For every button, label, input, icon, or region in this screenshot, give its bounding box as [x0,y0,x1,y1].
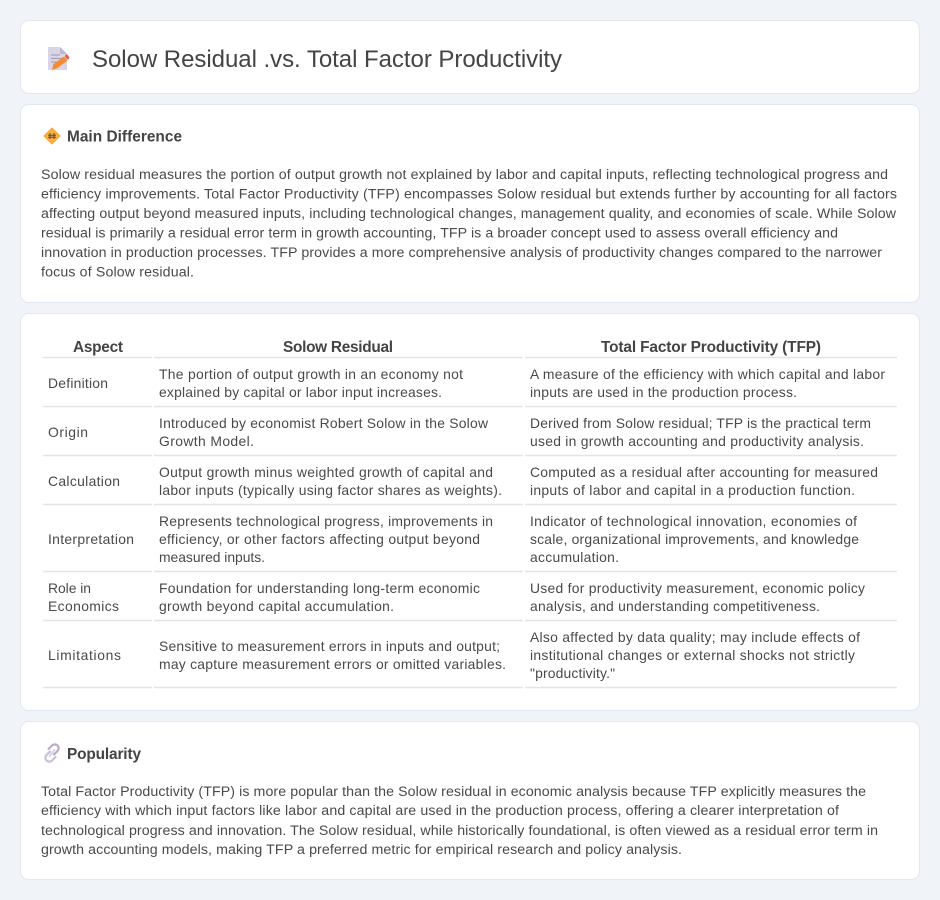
table row: calculation: inputs of labor and capital in a production function. [530,482,855,498]
panel: header [20,20,920,94]
table row: interpretation: measured inputs. [159,549,265,565]
text block: main difference paragraph: efficiency improvements. Total Factor Productivity (TFP) encompasses Solow residual but extends further by accounting for all factors [41,186,897,202]
table row: calculation: Computed as a residual after accounting for measured [530,464,878,480]
text block: popularity paragraph [41,784,878,858]
table row: interpretation [43,513,897,572]
icon: chain link [45,744,59,762]
table row: limitations: "productivity." [530,665,615,681]
table row: limitations: Also affected by data quality; may include effects of [530,629,860,645]
table row: origin: Origin [48,424,88,440]
text block: main difference paragraph: Solow residual measures the portion of output growth not explained by labor and capital inputs, reflecting technological progress and [41,167,888,183]
panel: main difference [20,104,920,302]
text block: main difference paragraph: residual is primarily a residual error term in growth accounting, TFP is a broader concept used to assess overall efficiency and [41,226,838,242]
table header row [43,339,897,358]
table header row: Total Factor Productivity (TFP) [601,339,821,356]
table row: role in economics: Used for productivity measurement, economic policy [530,580,865,596]
panel: popularity [20,722,920,880]
icon: document with pencil [48,47,70,70]
table header row: Aspect [73,339,123,356]
text block: main difference paragraph: affecting output beyond measured inputs, including technological changes, management quality, and economies of scale. While Solow [41,206,897,222]
table row: limitations: may capture measurement errors or omitted variables. [159,656,506,672]
table row: limitations: Sensitive to measurement errors in inputs and output; [159,638,500,654]
panel: comparison table [20,314,920,710]
table row: interpretation: scale, organizational improvements, and knowledge [530,531,859,547]
table row: role in economics: Foundation for understanding long-term economic [159,580,480,596]
table row: role in economics: Role in [48,580,91,596]
table row: origin: Growth Model. [159,433,254,449]
table row: calculation: labor inputs (typically using factor shares as weights). [159,482,502,498]
table row: definition: inputs are used in the production process. [530,384,797,400]
table row: role in economics: Economics [48,598,119,614]
table row: definition [43,366,897,406]
table row: origin: Introduced by economist Robert Solow in the Solow [159,415,489,431]
table row: interpretation: Represents technological progress, improvements in [159,513,493,529]
text block: popularity paragraph: growth accounting models, making TFP a preferred metric for empirical research and policy analysis. [41,842,682,858]
table row: definition: The portion of output growth in an economy not [159,366,463,382]
text block: main difference paragraph: focus of Solow residual. [41,264,194,280]
text block: popularity paragraph: Total Factor Productivity (TFP) is more popular than the Solow residual in economic analysis because TFP explicitly measures the [41,784,866,800]
table row: calculation: Output growth minus weighted growth of capital and [159,464,493,480]
table row: calculation [43,464,897,504]
text block: main difference paragraph [41,167,897,280]
table row: origin: Derived from Solow residual; TFP is the practical term [530,415,871,431]
table row: role in economics: growth beyond capital accumulation. [159,598,394,614]
heading: main difference: Main Difference [67,128,182,146]
table row: interpretation: Indicator of technological innovation, economies of [530,513,857,529]
table row: role in economics [43,580,897,620]
table header row: Solow Residual [283,339,393,356]
text block: popularity paragraph: technological progress and innovation. The Solow residual, while historically foundational, is often viewed as a residual error term in [41,823,878,839]
table row: limitations: Limitations [48,647,121,663]
table row: interpretation: accumulation. [530,549,619,565]
table row: interpretation: efficiency, or other factors affecting output beyond [159,531,480,547]
table row: interpretation: Interpretation [48,531,134,547]
table row: origin [43,415,897,456]
icon: orange diamond [44,128,60,144]
table row: definition: Definition [48,375,108,391]
table row: origin: used in growth accounting and productivity analysis. [530,433,864,449]
heading: popularity: Popularity [67,746,141,763]
title: Solow Residual .vs. Total Factor Productivity [92,46,562,73]
table row: limitations [43,629,897,688]
table row: definition: explained by capital or labor input increases. [159,384,442,400]
text block: popularity paragraph: efficiency with which input factors like labor and capital are used in the production process, offering a clearer interpretation of [41,803,839,819]
table row: calculation: Calculation [48,473,120,489]
table row: role in economics: analysis, and understanding competitiveness. [530,598,820,614]
text block: main difference paragraph: innovation in production processes. TFP provides a more comprehensive analysis of productivity changes compared to the narrower [41,245,882,261]
table row: definition: A measure of the efficiency with which capital and labor [530,366,885,382]
table row: limitations: institutional changes or external shocks not strictly [530,647,855,663]
